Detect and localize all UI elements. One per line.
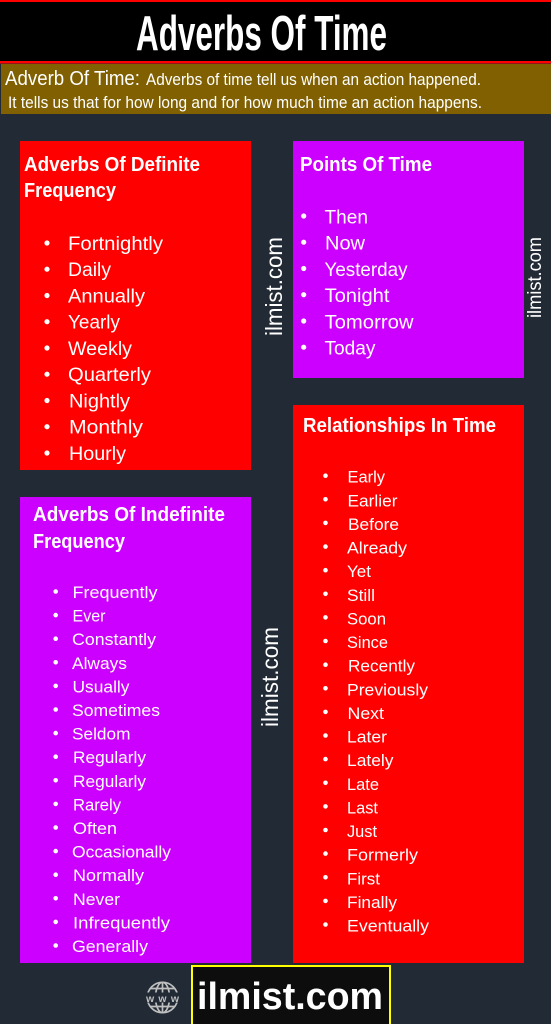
panel: relationships in time: Next — [348, 704, 384, 723]
panel: relationships in time: Just — [347, 822, 377, 841]
panel: relationships in time: Recently — [348, 657, 416, 676]
panel: relationships in time: Early — [348, 468, 385, 487]
watermark: right: ilmist.com — [524, 237, 546, 318]
panel: adverbs of indefinite frequency: Infrequently — [73, 913, 171, 932]
panel: adverbs of definite frequency — [20, 141, 251, 470]
panel: relationships in time: Eventually — [347, 916, 430, 936]
panel: adverbs of indefinite frequency: Frequency — [33, 531, 126, 553]
panel: adverbs of indefinite frequency: Seldom — [72, 725, 130, 744]
panel: adverbs of definite frequency: Hourly — [69, 443, 126, 465]
panel: adverbs of definite frequency: Weekly — [68, 338, 132, 360]
panel: adverbs of indefinite frequency — [20, 497, 251, 963]
panel: adverbs of indefinite frequency: Occasionally — [72, 843, 172, 862]
panel: relationships in time — [293, 405, 524, 963]
panel: points of time — [293, 141, 524, 378]
panel: relationships in time: Lately — [347, 751, 394, 770]
panel: adverbs of definite frequency: Daily — [68, 259, 111, 281]
panel: adverbs of indefinite frequency: Adverbs Of Indefinite — [33, 504, 225, 526]
panel: points of time: Now — [325, 232, 366, 254]
panel: adverbs of indefinite frequency: Regularly — [73, 748, 147, 767]
panel: adverbs of definite frequency: Adverbs Of Definite — [24, 154, 200, 176]
panel: adverbs of definite frequency: Fortnightly — [68, 233, 163, 255]
panel: adverbs of indefinite frequency: Often — [73, 819, 117, 838]
panel: points of time: Today — [324, 338, 376, 360]
title banner — [0, 0, 551, 64]
website badge: ilmist.com — [197, 976, 383, 1018]
website badge — [192, 966, 390, 1024]
definition band — [1, 64, 551, 114]
panel: adverbs of definite frequency: Yearly — [68, 312, 120, 334]
panel: relationships in time: Since — [347, 633, 388, 652]
panel: adverbs of indefinite frequency: Usually — [72, 677, 130, 696]
panel: adverbs of indefinite frequency: Never — [73, 890, 120, 909]
panel: adverbs of definite frequency: Nightly — [69, 390, 130, 412]
panel: adverbs of indefinite frequency: Always — [72, 654, 127, 673]
panel: adverbs of indefinite frequency: Sometimes — [72, 701, 160, 720]
panel: adverbs of definite frequency: Frequency — [24, 180, 117, 202]
definition band: It tells us that for how long and for how much time an action happens. — [8, 93, 482, 112]
panel: relationships in time: Still — [347, 586, 375, 605]
panel: relationships in time: Earlier — [348, 491, 398, 510]
panel: relationships in time: Finally — [347, 893, 398, 912]
watermark: left upper: ilmist.com — [261, 237, 287, 336]
definition band: Adverb Of Time: — [5, 68, 140, 90]
panel: relationships in time: Relationships In Time — [303, 415, 496, 437]
panel: points of time: Points Of Time — [300, 154, 432, 176]
definition band: Adverbs of time tell us when an action happened. — [146, 70, 481, 89]
panel: relationships in time: Formerly — [347, 846, 419, 865]
panel: relationships in time: Late — [347, 775, 379, 794]
panel: adverbs of definite frequency: Annually — [68, 286, 145, 308]
panel: adverbs of indefinite frequency: Rarely — [73, 795, 121, 814]
title: Adverbs Of Time — [136, 7, 387, 61]
watermark: middle lower: ilmist.com — [257, 627, 283, 727]
panel: adverbs of indefinite frequency: Regularly — [73, 772, 147, 791]
panel: relationships in time: Later — [347, 728, 387, 746]
panel: relationships in time: Before — [348, 515, 399, 534]
panel: adverbs of indefinite frequency: Normally — [73, 866, 145, 885]
icon: www globe: www — [145, 993, 180, 1005]
panel: points of time: Yesterday — [324, 259, 408, 281]
panel: relationships in time: Last — [347, 798, 378, 817]
panel: relationships in time: Previously — [347, 680, 429, 699]
panel: adverbs of indefinite frequency: Frequently — [72, 583, 158, 602]
panel: relationships in time: First — [347, 869, 380, 888]
panel: relationships in time: Yet — [347, 562, 371, 581]
panel: adverbs of indefinite frequency: Ever — [72, 607, 106, 626]
panel: points of time: Then — [324, 206, 368, 228]
panel: adverbs of definite frequency: Quarterly — [68, 364, 151, 386]
panel: points of time: Tonight — [324, 285, 390, 307]
panel: adverbs of indefinite frequency: Generally — [72, 937, 149, 956]
panel: adverbs of indefinite frequency: Constantly — [72, 630, 157, 649]
panel: relationships in time: Already — [347, 539, 408, 558]
panel: adverbs of definite frequency: Monthly — [69, 417, 143, 439]
panel: points of time: Tomorrow — [324, 311, 414, 333]
icon: www globe — [145, 982, 180, 1013]
panel: relationships in time: Soon — [347, 609, 386, 628]
